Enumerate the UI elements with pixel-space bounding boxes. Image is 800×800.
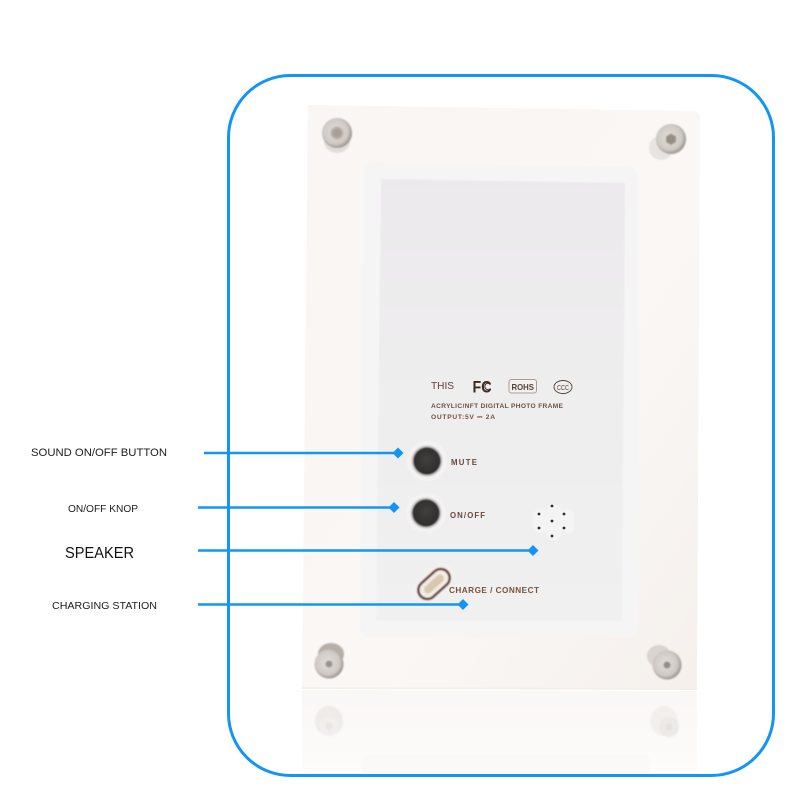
ROHS mark bbox=[509, 380, 536, 393]
label: charging station: CHARGING STATION bbox=[52, 600, 157, 612]
white back panel bbox=[360, 163, 638, 637]
frame reflection bbox=[302, 690, 697, 775]
charging port bbox=[407, 558, 461, 610]
screw: top right bbox=[649, 124, 686, 160]
product photo: acrylic frame back bbox=[302, 105, 700, 775]
product description: ACRYLIC/NFT DIGITAL PHOTO FRAME bbox=[431, 403, 564, 410]
mute button bbox=[407, 441, 447, 481]
ROHS mark: ROHS bbox=[512, 382, 534, 392]
screw: bottom right bbox=[647, 645, 682, 680]
certification row bbox=[431, 378, 572, 396]
on/off label: ON/OFF bbox=[450, 511, 485, 520]
mute label: MUTE bbox=[451, 458, 477, 467]
speaker grille bbox=[534, 504, 574, 540]
screw: bottom left bbox=[314, 643, 344, 678]
FC mark: FC bbox=[472, 378, 492, 396]
label: speaker: SPEAKER bbox=[65, 545, 134, 562]
product description: OUTPUT:5V ⎓ 2A bbox=[431, 414, 495, 421]
CCC mark bbox=[554, 380, 572, 394]
label: sound on/off button: SOUND ON/OFF BUTTON bbox=[31, 447, 167, 459]
charge label: CHARGE / CONNECT bbox=[449, 586, 539, 595]
THIS mark: THIS bbox=[431, 380, 454, 392]
callout: speaker bbox=[198, 545, 538, 556]
inner label area bbox=[376, 179, 625, 621]
product description bbox=[431, 403, 564, 421]
label: on/off knop: ON/OFF KNOP bbox=[68, 503, 138, 515]
CCC mark: CCC bbox=[557, 383, 569, 392]
screw: top left bbox=[322, 118, 352, 153]
acrylic plate bbox=[302, 105, 700, 688]
rounded blue outline bbox=[228, 76, 774, 776]
callout: sound on/off button bbox=[204, 448, 404, 458]
frame bottom edge highlight bbox=[302, 687, 697, 690]
on/off button bbox=[406, 493, 446, 533]
callout: on/off knop bbox=[198, 502, 400, 513]
callout: charging station bbox=[198, 599, 468, 610]
